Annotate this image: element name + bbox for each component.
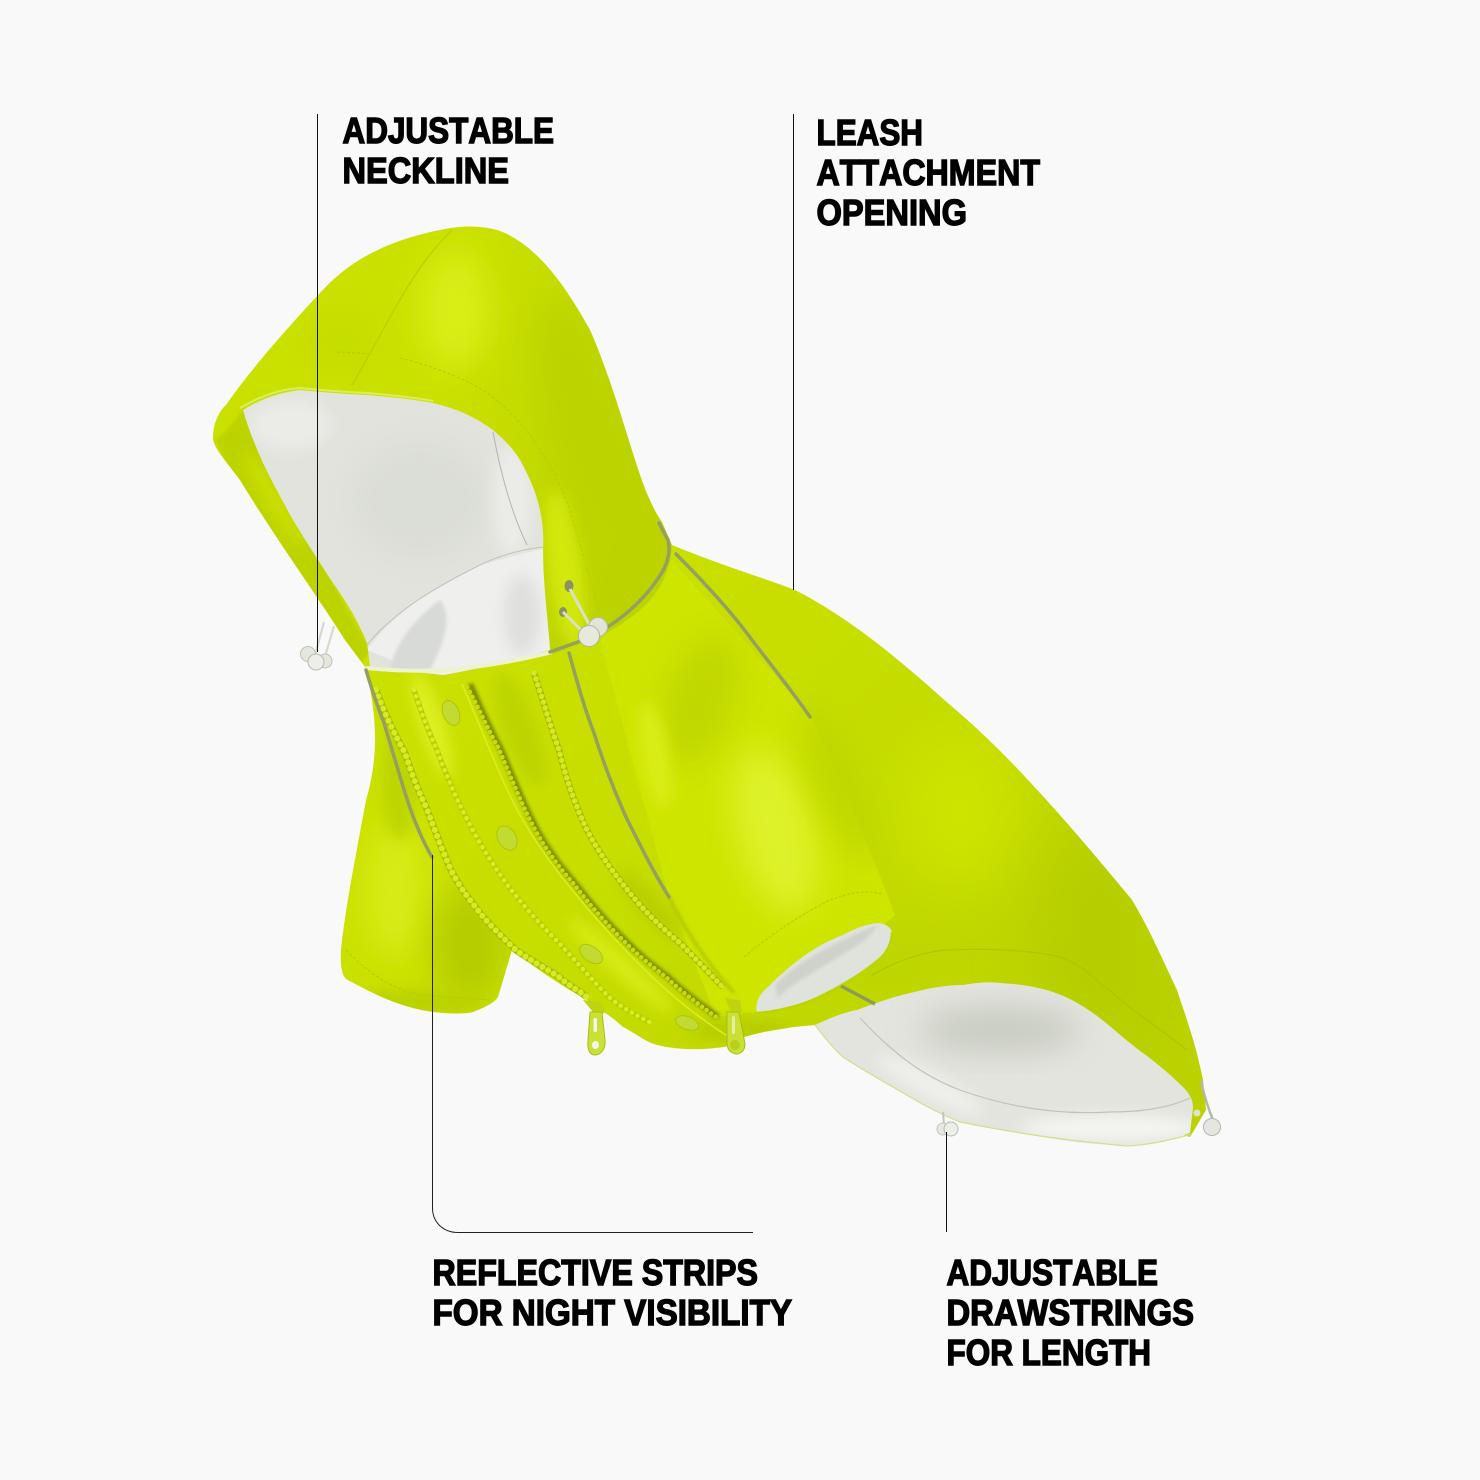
label: adjustable drawstrings for length: FOR LENGTH [946,1332,1151,1373]
label: adjustable neckline: NECKLINE [342,150,509,191]
leader line: adjustable neckline [316,114,318,652]
icon: right zipper pull [725,998,745,1054]
label: adjustable neckline [342,110,554,191]
label: adjustable drawstrings for length [946,1252,1194,1373]
label: adjustable neckline: ADJUSTABLE [342,110,554,151]
infographic canvas [213,114,1221,1366]
coat body [366,545,1206,1137]
label: reflective strips for night visibility [432,1252,792,1333]
hem white lining [815,982,1193,1145]
front leg [340,674,512,1014]
label: reflective strips for night visibility: FOR NIGHT VISIBILITY [432,1292,792,1333]
icon: hem drawstring toggle right [1194,1081,1220,1136]
hood white lining [243,390,550,675]
hem seam and reflective end [815,949,1192,1146]
label: leash attachment opening [816,112,1040,233]
chest panels [408,673,456,778]
front zippers, placket and snaps [366,652,742,1045]
label: reflective strips for night visibility: REFLECTIVE STRIPS [432,1252,758,1293]
icon: hem drawstring toggle left [937,1112,958,1136]
sleeve shading [665,828,895,1016]
label: leash attachment opening: ATTACHMENT [816,152,1040,193]
icon: snap buttons [439,698,700,1033]
sleeve cuff [744,892,892,1013]
icon: left zipper pull [583,1000,605,1055]
reflective strips [366,523,810,897]
label: leash attachment opening: OPENING [816,192,967,233]
icon: hood toggle and cord [559,580,608,646]
icon: neck drawstring toggle [300,622,334,670]
label: adjustable drawstrings for length: DRAWSTRINGS [946,1292,1194,1333]
hood [213,226,672,668]
label: leash attachment opening: LEASH [816,112,923,153]
label: adjustable drawstrings for length: ADJUSTABLE [946,1252,1158,1293]
leader line: adjustable drawstrings [946,1132,948,1232]
leader line: reflective strips [432,855,753,1232]
raincoat illustration [213,226,1220,1155]
leader line: leash attachment opening [792,114,794,590]
